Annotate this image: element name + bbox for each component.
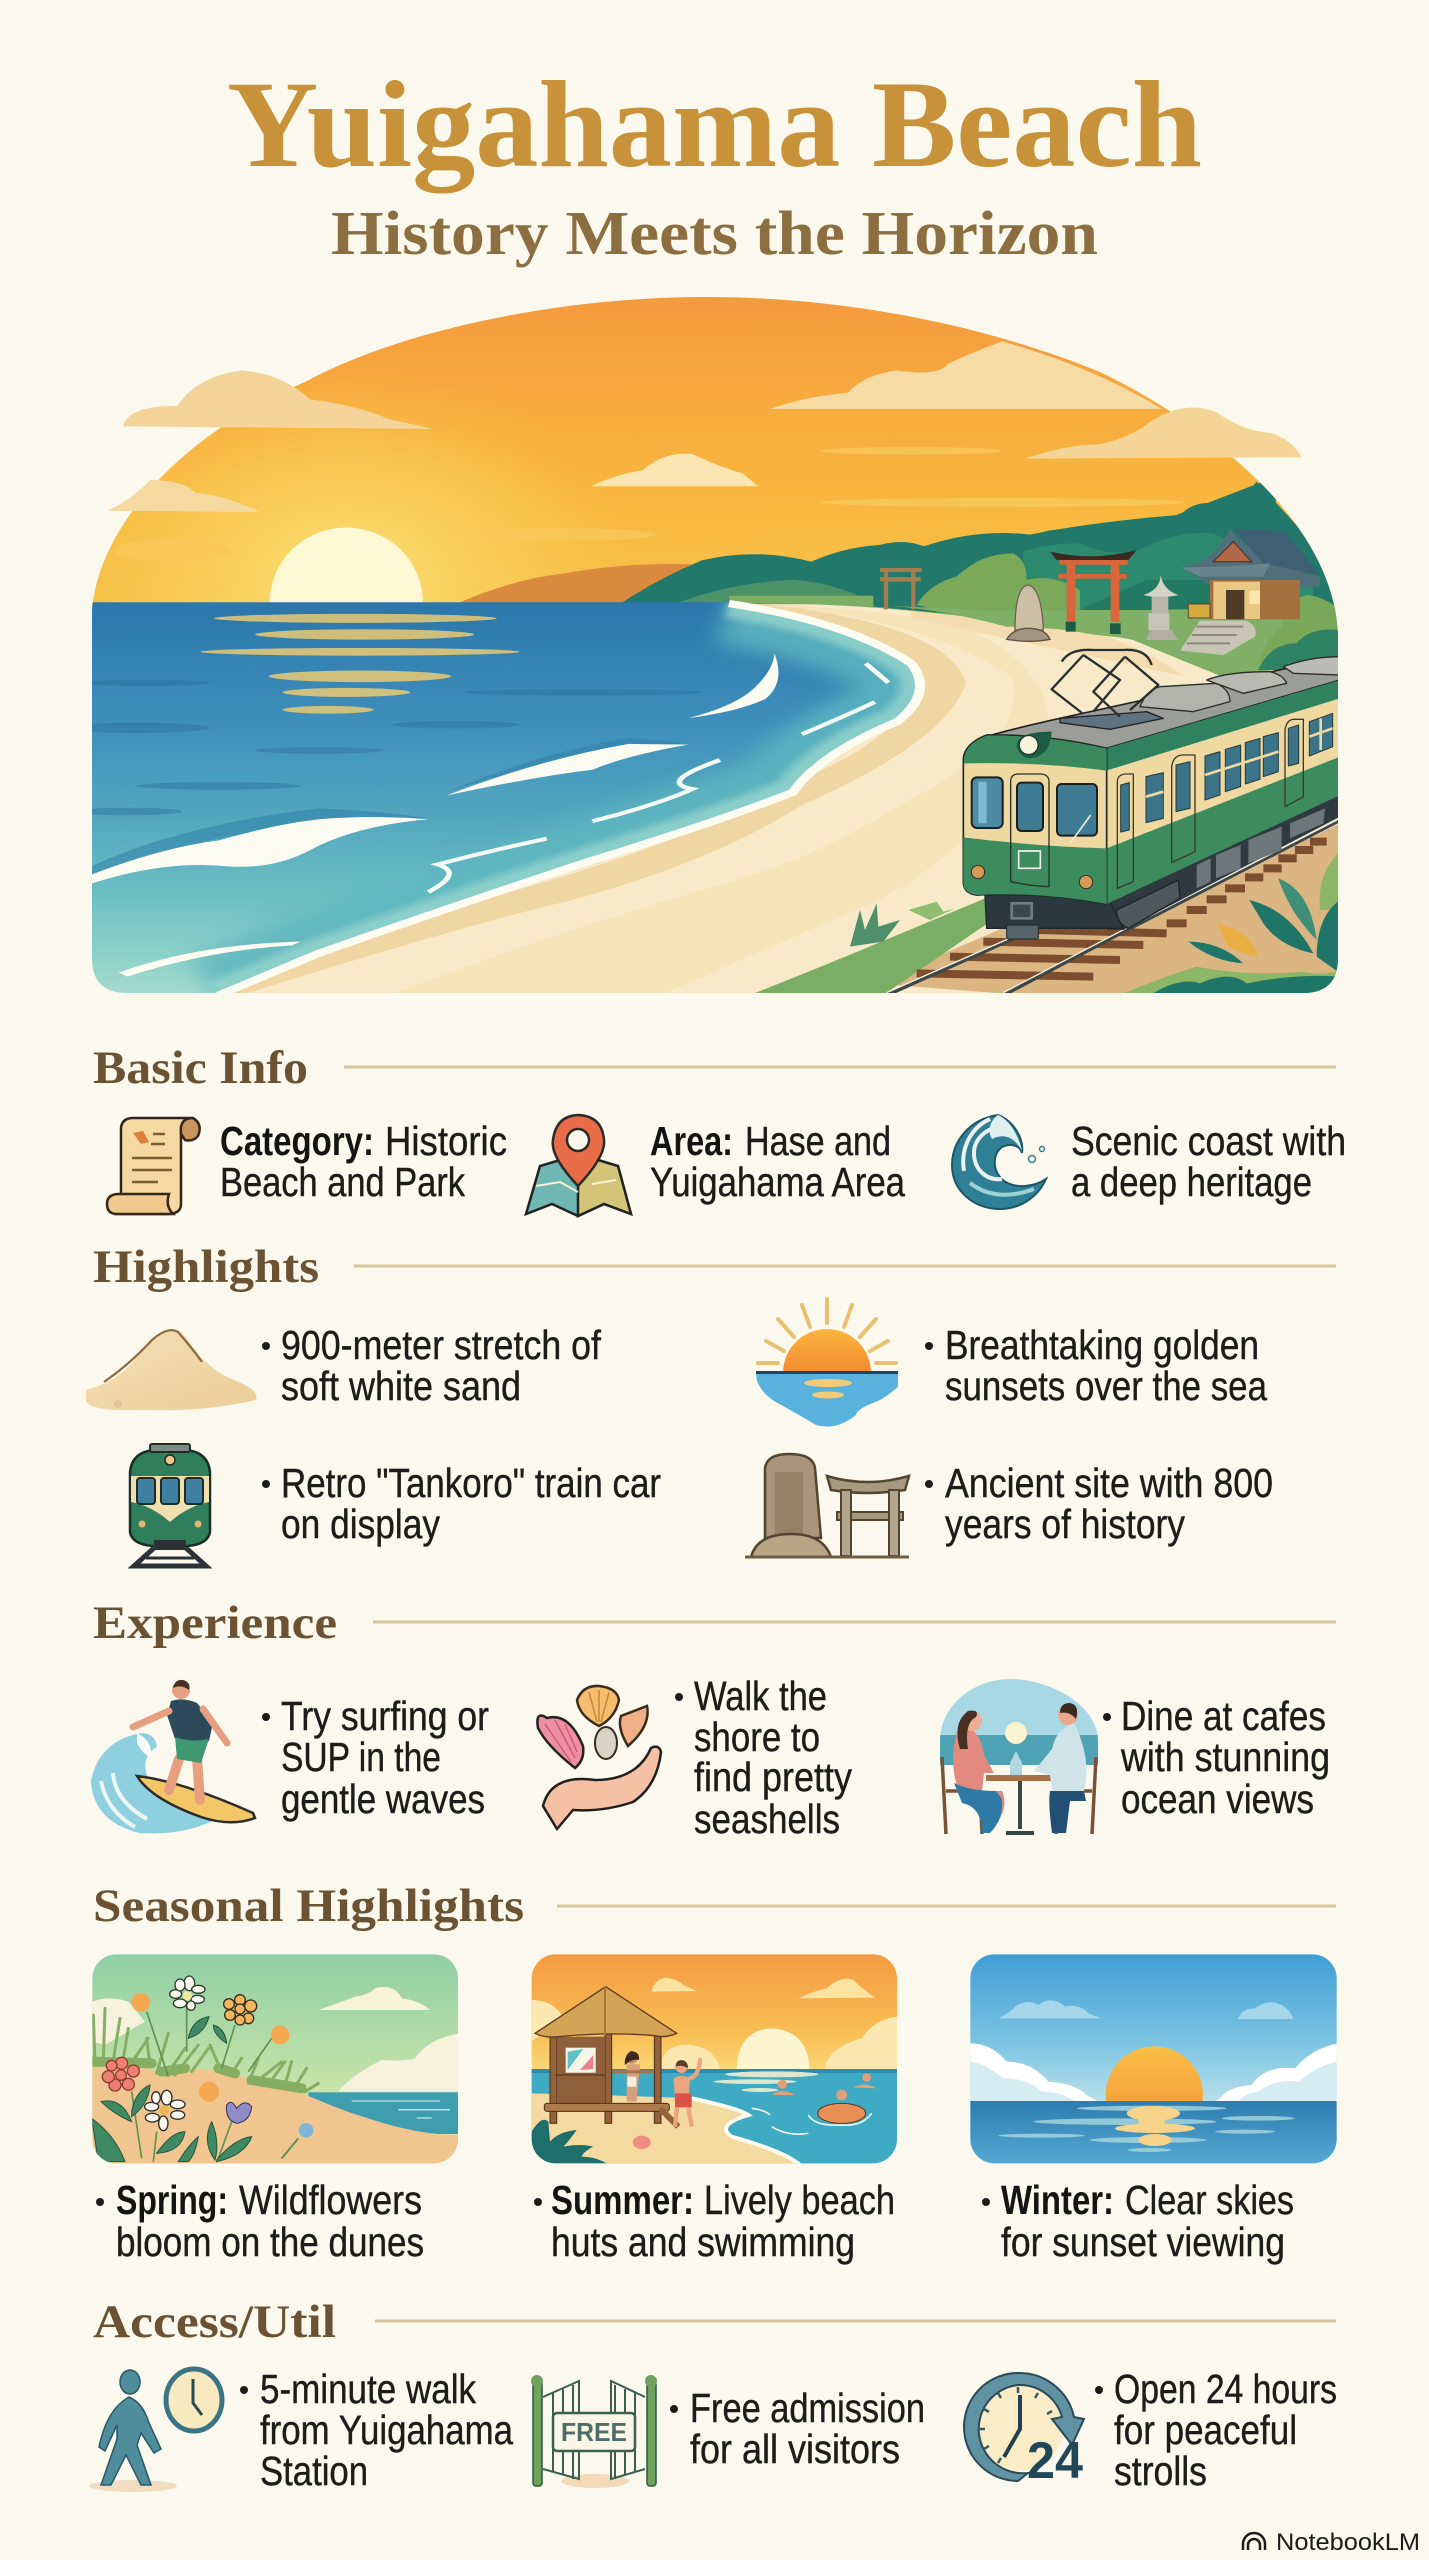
foreground leaves bbox=[1120, 852, 1340, 995]
text: category: Category: bbox=[220, 1118, 374, 1164]
clock number: 24 bbox=[1027, 2432, 1083, 2490]
sky bbox=[90, 295, 1340, 607]
highlight text: tankoro: on display bbox=[281, 1501, 440, 1547]
highlight text: ancient site bbox=[925, 1460, 1273, 1547]
section heading: Experience: Experience bbox=[93, 1597, 337, 1649]
text: area: Area: bbox=[650, 1118, 733, 1164]
dune grass bbox=[93, 2008, 318, 2092]
watermark: NotebookLM: NotebookLM bbox=[1276, 2529, 1420, 2556]
temple stairs bbox=[1180, 621, 1256, 655]
hero scene clipped to arch bbox=[64, 295, 1349, 1005]
access text: walk: from Yuigahama bbox=[260, 2407, 513, 2453]
text: scenic coast: Scenic coast with bbox=[1071, 1118, 1346, 1164]
breaking waves bbox=[91, 654, 778, 976]
panel: winter image bbox=[970, 1953, 1338, 2164]
highlight text: tankoro: Retro "Tankoro" train car bbox=[281, 1460, 661, 1506]
experience text: seashells: shore to bbox=[694, 1714, 820, 1760]
winter caption: Winter: bbox=[1001, 2177, 1114, 2223]
sun reflection bbox=[200, 614, 519, 714]
experience text: dining: Dine at cafes bbox=[1121, 1693, 1326, 1739]
sun bbox=[270, 528, 423, 602]
spring caption: Wildflowers bbox=[239, 2177, 422, 2223]
section heading: Highlights: Highlights bbox=[93, 1241, 319, 1293]
access text: open bbox=[1095, 2366, 1337, 2494]
summer caption: huts and swimming bbox=[551, 2219, 855, 2265]
stone lantern bbox=[1143, 575, 1178, 640]
foam bbox=[219, 604, 920, 995]
dark water streaks bbox=[64, 680, 702, 815]
access text: free bbox=[670, 2385, 925, 2472]
winter caption: Clear skies bbox=[1125, 2177, 1294, 2223]
distant hills bbox=[460, 564, 692, 602]
icon: 24 hour clock bbox=[964, 2373, 1084, 2490]
experience text: seashells: seashells bbox=[694, 1796, 840, 1842]
text: area: Hase and bbox=[745, 1118, 891, 1164]
text: scenic coast: a deep heritage bbox=[1071, 1159, 1312, 1205]
highlight text: sunsets: sunsets over the sea bbox=[945, 1363, 1267, 1409]
track bed bbox=[873, 823, 1340, 993]
swell behind waves bbox=[91, 737, 688, 876]
highlight text: tankoro bbox=[262, 1460, 661, 1547]
text: area bbox=[650, 1118, 905, 1205]
section heading: Basic Info: Basic Info bbox=[93, 1042, 308, 1094]
summer caption: Summer: bbox=[551, 2177, 694, 2223]
roof vents bbox=[1140, 683, 1230, 712]
highlight text: ancient site: years of history bbox=[945, 1501, 1185, 1547]
icon: walker and clock bbox=[89, 2369, 222, 2492]
access text: free: for all visitors bbox=[690, 2426, 900, 2472]
experience text: surfing: gentle waves bbox=[281, 1776, 485, 1822]
sea bbox=[91, 602, 920, 995]
experience text: seashells: Walk the bbox=[694, 1673, 827, 1719]
front door bbox=[1011, 774, 1049, 887]
distant torii bbox=[880, 570, 922, 609]
summer caption: Lively beach bbox=[704, 2177, 895, 2223]
icon: stone and torii bbox=[745, 1454, 909, 1557]
summer caption bbox=[534, 2177, 895, 2265]
grass strip bbox=[750, 898, 990, 995]
side of car bbox=[1107, 680, 1340, 771]
panel: hero illustration bbox=[64, 295, 1349, 1005]
front windows bbox=[972, 777, 1097, 836]
sky and shore in stretched coordinates bbox=[92, 411, 1338, 993]
highlight text: sand bbox=[262, 1322, 602, 1409]
side windows bbox=[1121, 713, 1333, 832]
access text: free: Free admission bbox=[690, 2385, 925, 2431]
highlight text: sand: soft white sand bbox=[281, 1363, 521, 1409]
icon: seashells and hand bbox=[537, 1686, 661, 1829]
text: area: Yuigahama Area bbox=[650, 1159, 905, 1205]
roof bbox=[977, 657, 1340, 748]
foam ripples bbox=[428, 663, 889, 892]
experience text: seashells: find pretty bbox=[694, 1754, 852, 1800]
access text: open: Open 24 hours bbox=[1114, 2366, 1337, 2412]
icon: surfer bbox=[91, 1680, 255, 1834]
highlight text: sand: 900-meter stretch of bbox=[281, 1322, 602, 1368]
coastline landmarks and train bbox=[750, 482, 1347, 995]
icon: scroll bbox=[107, 1118, 200, 1214]
experience text: surfing bbox=[262, 1693, 489, 1822]
experience text: dining: with stunning bbox=[1120, 1734, 1330, 1780]
temple bbox=[1180, 528, 1320, 619]
experience text: dining: ocean views bbox=[1121, 1776, 1314, 1822]
text: scenic coast bbox=[1071, 1118, 1346, 1205]
icon: sand pile bbox=[86, 1329, 257, 1410]
gate sign text: FREE bbox=[561, 2417, 627, 2447]
icon: wave bbox=[952, 1115, 1046, 1209]
subtitle: History Meets the Horizon bbox=[331, 200, 1098, 268]
winter caption: for sunset viewing bbox=[1001, 2219, 1285, 2265]
wooded hills bbox=[873, 482, 1347, 620]
red torii bbox=[1050, 550, 1137, 634]
icon: sunset bbox=[756, 1299, 898, 1427]
icon: map pin bbox=[526, 1115, 631, 1216]
access text: open: strolls bbox=[1114, 2448, 1207, 2494]
front face bbox=[963, 735, 1107, 904]
flowers bbox=[170, 1976, 205, 2010]
shallow water along shore bbox=[219, 604, 920, 995]
section heading: Seasonal Highlights: Seasonal Highlights bbox=[93, 1880, 524, 1932]
undercarriage bbox=[1107, 795, 1340, 930]
access text: walk: Station bbox=[260, 2448, 368, 2494]
highlight text: sunsets: Breathtaking golden bbox=[945, 1322, 1259, 1368]
spring caption: bloom on the dunes bbox=[116, 2219, 424, 2265]
sand base bbox=[73, 604, 1349, 1005]
icon: retro train bbox=[130, 1444, 210, 1566]
hut bbox=[535, 1987, 678, 2127]
clouds overlapping arch bbox=[108, 341, 1301, 512]
rails bbox=[887, 820, 1340, 995]
experience text: seashells bbox=[675, 1673, 852, 1842]
highlight text: sunsets bbox=[925, 1322, 1267, 1409]
experience text: surfing: SUP in the bbox=[281, 1734, 441, 1780]
section heading: Access/Util: Access/Util bbox=[93, 2296, 336, 2348]
train bbox=[963, 650, 1340, 939]
text: category: Beach and Park bbox=[220, 1159, 465, 1205]
rail ties bbox=[917, 842, 1327, 977]
panel: spring image bbox=[92, 1953, 460, 2167]
highlight text: ancient site: Ancient site with 800 bbox=[945, 1460, 1273, 1506]
panel: summer image bbox=[531, 1953, 898, 2166]
text: category: Historic bbox=[385, 1118, 507, 1164]
icon: couple dining bbox=[940, 1679, 1098, 1837]
access text: open: for peaceful bbox=[1114, 2407, 1297, 2453]
people bbox=[612, 2051, 654, 2102]
experience text: surfing: Try surfing or bbox=[281, 1693, 489, 1739]
access text: walk bbox=[240, 2366, 513, 2494]
text: category bbox=[220, 1118, 507, 1205]
spring caption bbox=[96, 2177, 424, 2265]
winter caption bbox=[982, 2177, 1294, 2265]
grass bbox=[873, 605, 1347, 678]
spring caption: Spring: bbox=[116, 2177, 228, 2223]
memorial stone bbox=[1007, 585, 1050, 641]
title: Yuigahama Beach bbox=[227, 56, 1202, 194]
experience text: dining bbox=[1103, 1693, 1330, 1822]
grass tufts bbox=[850, 902, 955, 947]
icon: free gate bbox=[531, 2375, 657, 2488]
pantograph bbox=[1052, 650, 1163, 729]
headlamp bbox=[1017, 732, 1052, 758]
access text: walk: 5-minute walk bbox=[260, 2366, 476, 2412]
